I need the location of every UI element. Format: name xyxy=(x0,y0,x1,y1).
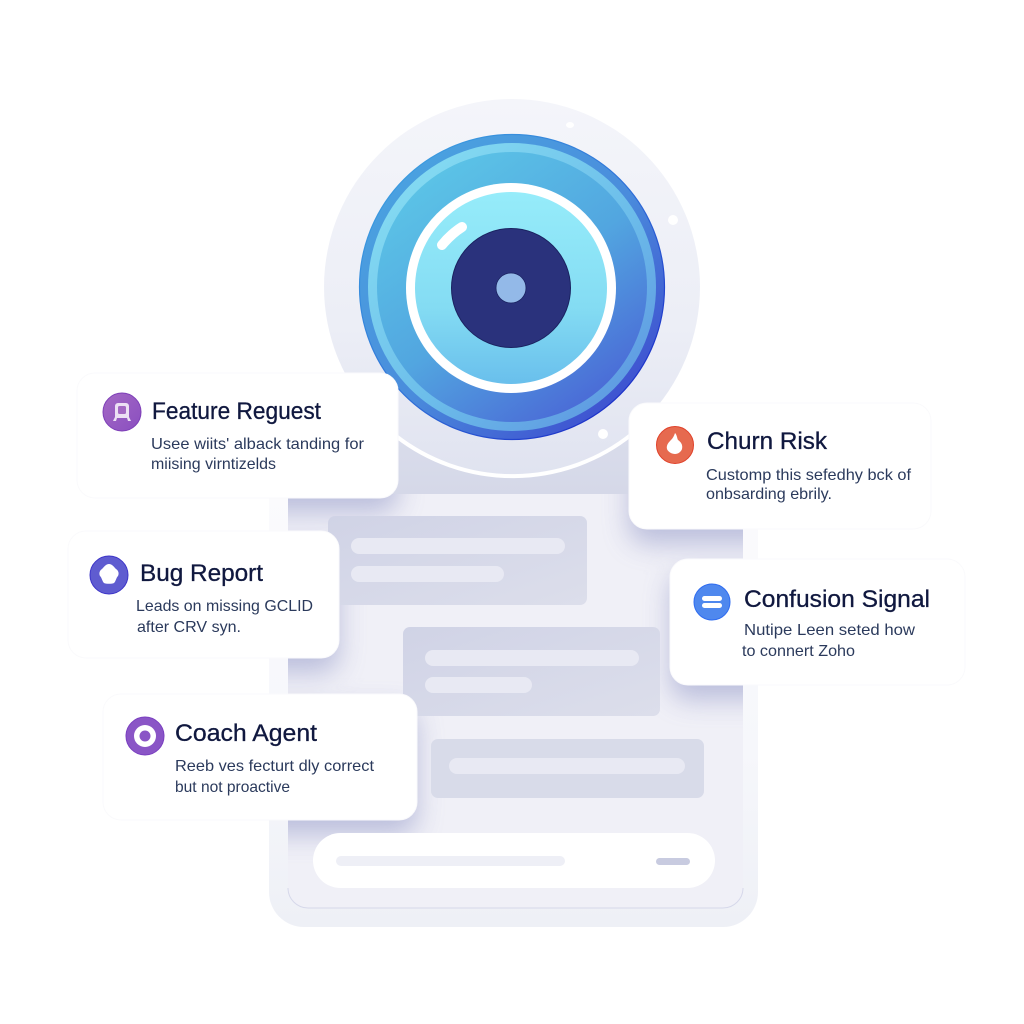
white arc under the eye xyxy=(396,434,632,476)
description xyxy=(742,622,915,660)
background halo behind eye xyxy=(324,99,700,475)
iris xyxy=(415,192,607,384)
description: to connert Zoho xyxy=(742,643,855,660)
description xyxy=(706,467,912,503)
icon: churn risk flame xyxy=(656,426,694,464)
card: Bug Report xyxy=(68,531,339,658)
description: but not proactive xyxy=(175,779,290,796)
description: Reeb ves fecturt dly correct xyxy=(175,758,375,775)
description: onbsarding ebrily. xyxy=(706,486,832,503)
heading: Bug Report xyxy=(140,560,263,587)
heading: Coach Agent xyxy=(175,720,317,747)
phone neck under the eye xyxy=(390,400,640,494)
chat bubble 1 xyxy=(328,516,587,605)
chat bubble 2 xyxy=(403,627,660,716)
phone mockup xyxy=(269,400,758,927)
card shadows on the screen xyxy=(288,494,743,848)
pupil centre xyxy=(496,273,526,303)
eye light ring xyxy=(368,143,656,431)
white iris ring xyxy=(406,183,616,393)
description: Leads on missing GCLID xyxy=(136,598,313,615)
card: Coach Agent xyxy=(103,694,417,820)
highlight xyxy=(442,227,462,245)
description: miising virntizelds xyxy=(151,456,276,473)
description: Customp this sefedhy bck of xyxy=(706,467,912,484)
eye main fill xyxy=(377,152,647,422)
heading: Churn Risk xyxy=(707,428,828,455)
card: Confusion Signal xyxy=(670,559,965,685)
phone screen xyxy=(288,494,743,908)
icon: bug report xyxy=(90,556,128,594)
screen bottom edge xyxy=(288,888,743,908)
card: Churn Risk xyxy=(629,403,931,529)
chat bubble 3 xyxy=(431,739,704,798)
pupil xyxy=(452,228,570,348)
description xyxy=(151,436,365,473)
sparkle dots xyxy=(566,122,678,439)
message input pill xyxy=(313,833,715,888)
description: after CRV syn. xyxy=(137,619,241,636)
phone outer frame xyxy=(269,494,758,927)
chat messages xyxy=(313,516,715,888)
description: Nutipe Leen seted how xyxy=(744,622,915,639)
eye outer ring xyxy=(360,134,664,440)
description: Usee wiits' alback tanding for xyxy=(151,436,365,453)
icon: coach agent xyxy=(126,717,164,755)
description xyxy=(136,598,313,636)
eye illustration xyxy=(360,134,664,440)
card: Feature Request xyxy=(77,373,398,498)
description xyxy=(175,758,375,796)
heading: Confusion Signal xyxy=(744,586,930,613)
icon: confusion signal xyxy=(694,584,730,620)
heading: Feature Reguest xyxy=(152,398,321,425)
icon: feature request xyxy=(103,393,141,431)
